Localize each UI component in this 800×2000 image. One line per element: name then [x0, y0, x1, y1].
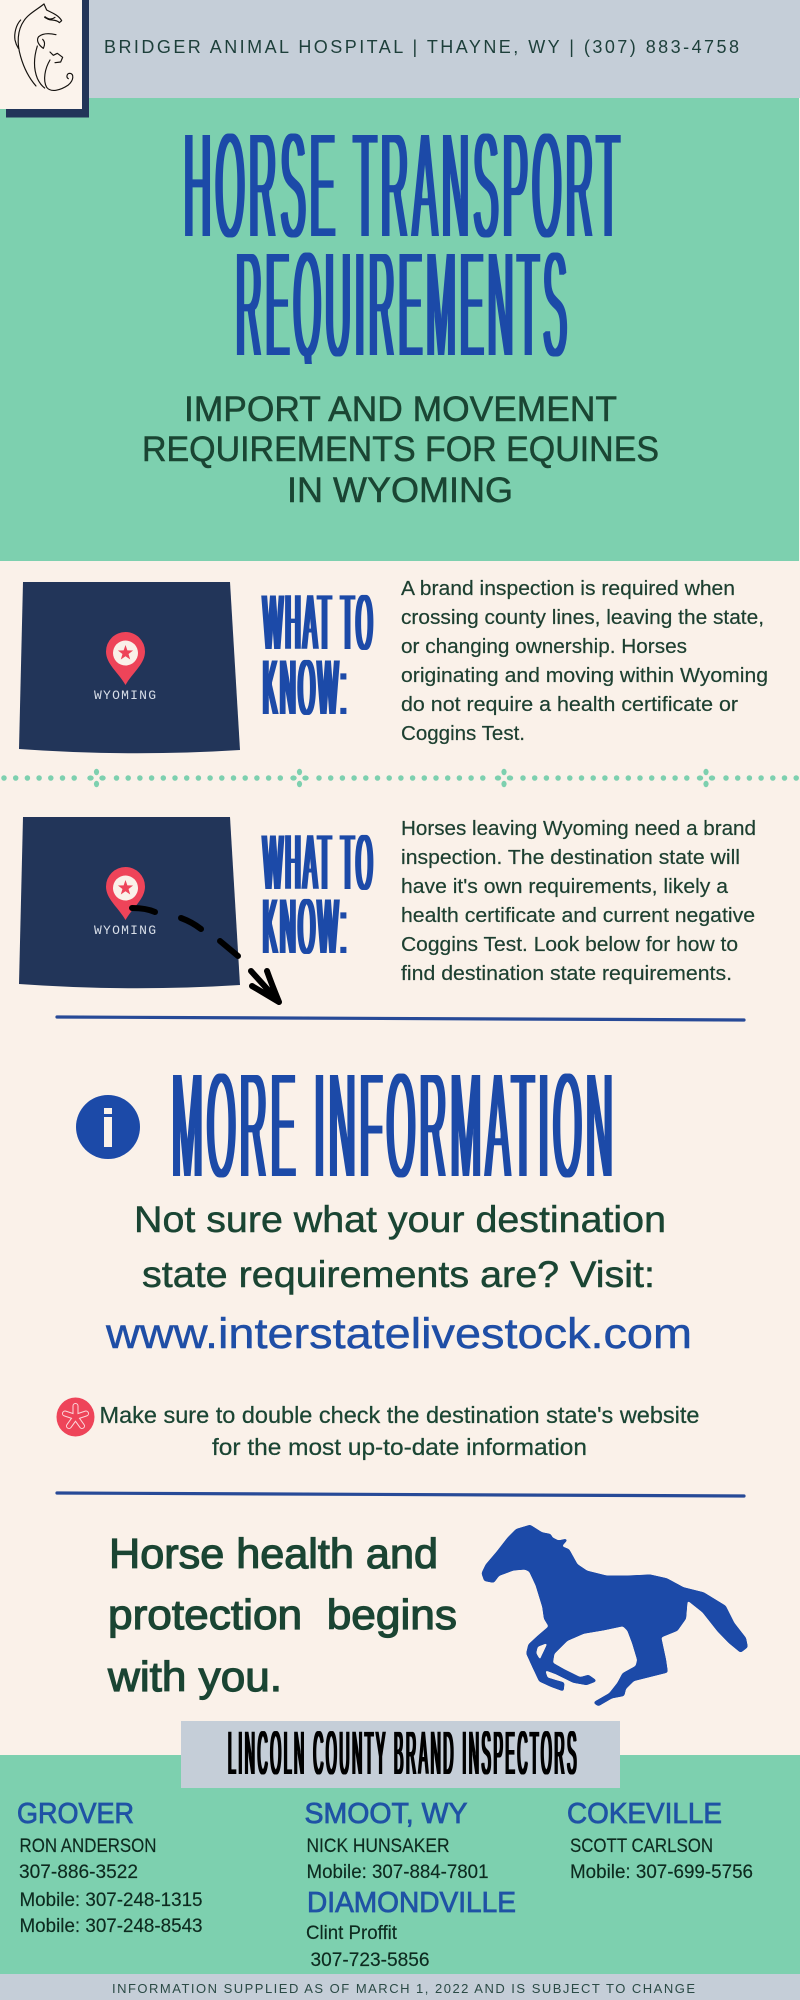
text block: out-of-state rules: Coggins Test. Look below for how to: [401, 933, 738, 956]
text block: out-of-state rules: find destination state requirements.: [401, 962, 732, 985]
heading: lincoln county brand inspectors: [181, 1719, 620, 1788]
text block: destination question: state requirements are? Visit:: [142, 1254, 655, 1295]
icon: location pin: [106, 867, 145, 920]
panel: horse health slogan: [107, 1526, 747, 1705]
website link: www.interstatelivestock.com: [105, 1310, 692, 1358]
contact: Grover: Mobile: 307-248-8543: [20, 1916, 202, 1937]
icon: Wyoming map with pin: [19, 817, 240, 988]
icon: clinic logo: [0, 0, 89, 118]
text block: in-state rules: or changing ownership. Horses: [401, 635, 687, 658]
text block: in-state rules: do not require a health certificate or: [401, 693, 738, 716]
text block: in-state rules: A brand inspection is required when: [401, 577, 735, 600]
contact: Cokeville: [567, 1798, 753, 1883]
contact: Smoot: Mobile: 307-884-7801: [306, 1862, 488, 1883]
contact: Smoot: SMOOT, WY: [304, 1798, 468, 1830]
contact: Grover: Mobile: 307-248-1315: [20, 1890, 202, 1911]
contact: Cokeville: SCOTT CARLSON: [570, 1836, 713, 1857]
text block: in-state rules: originating and moving within Wyoming: [401, 664, 768, 687]
contact: Cokeville: Mobile: 307-699-5756: [570, 1862, 753, 1883]
text block: double check note: Make sure to double check the destination state's website: [100, 1402, 700, 1428]
heading: what to know: [263, 818, 375, 972]
footer disclaimer: INFORMATION SUPPLIED AS OF MARCH 1, 2022 AND IS SUBJECT TO CHANGE: [112, 1981, 695, 1996]
heading: what to know: [263, 578, 375, 733]
text block: out-of-state rules: inspection. The destination state will: [401, 846, 740, 869]
panel: what to know, moving within Wyoming: WHAT TO: [263, 578, 375, 668]
panel: brand inspectors: [0, 1719, 800, 1974]
divider line: [57, 1493, 744, 1496]
text block: out-of-state rules: [401, 817, 756, 985]
arrow: dashed route out of state: [132, 908, 279, 1002]
text block: destination question: Not sure what your destination: [134, 1199, 666, 1240]
contact: Grover: RON ANDERSON: [20, 1836, 156, 1857]
footer: [0, 1974, 800, 2000]
text block: out-of-state rules: Horses leaving Wyoming need a brand: [401, 817, 756, 840]
text block: in-state rules: crossing county lines, leaving the state,: [401, 606, 764, 629]
divider line: [57, 1017, 744, 1020]
text block: double check note: for the most up-to-date information: [212, 1434, 587, 1460]
contact: Grover: 307-886-3522: [19, 1862, 138, 1883]
text block: out-of-state rules: health certificate and current negative: [401, 904, 755, 927]
text block: destination question: [134, 1199, 666, 1295]
contact: Grover: [17, 1798, 202, 1937]
panel: what to know, leaving Wyoming: WHAT TO: [263, 818, 375, 908]
dotted divider: [4, 769, 800, 787]
text block: slogan: Horse health and: [109, 1530, 438, 1577]
title: [185, 134, 621, 364]
panel: what to know, moving within Wyoming: [19, 577, 768, 753]
map label: WYOMING: [94, 923, 156, 938]
contact: Diamondville: 307-723-5856: [310, 1950, 430, 1971]
contact: Cokeville: COKEVILLE: [567, 1798, 722, 1830]
map label: WYOMING: [94, 688, 156, 703]
contact: Diamondville: [306, 1887, 516, 1971]
text block: slogan: protection begins: [108, 1591, 457, 1638]
panel: title section: [0, 98, 799, 561]
panel: what to know, leaving Wyoming: [19, 817, 756, 1002]
contact: Smoot: NICK HUNSAKER: [306, 1836, 450, 1857]
subtitle: REQUIREMENTS FOR EQUINES: [142, 430, 659, 469]
text block: in-state rules: Coggins Test.: [401, 722, 525, 745]
subtitle: [142, 390, 659, 510]
panel: what to know, moving within Wyoming: KNOW:: [263, 643, 349, 733]
panel: what to know, leaving Wyoming: KNOW:: [263, 882, 349, 972]
subtitle: IN WYOMING: [287, 471, 513, 510]
contact: Diamondville: DIAMONDVILLE: [307, 1887, 516, 1919]
subtitle: IMPORT AND MOVEMENT: [184, 390, 617, 429]
text block: slogan: [107, 1530, 457, 1700]
contact: Smoot: [304, 1798, 488, 1883]
text block: in-state rules: [401, 577, 768, 745]
text block: double check note: [100, 1402, 700, 1460]
contact: Diamondville: Clint Proffit: [306, 1923, 398, 1944]
icon: red asterisk badge: [56, 1398, 94, 1436]
text block: slogan: with you.: [107, 1653, 282, 1700]
header contact text: BRIDGER ANIMAL HOSPITAL | THAYNE, WY | (307) 883-4758: [104, 37, 739, 57]
icon: location pin: [106, 632, 145, 685]
icon: Wyoming map with pin: [19, 582, 240, 753]
contact: Grover: GROVER: [17, 1798, 134, 1830]
panel: more information: [56, 1041, 700, 1460]
icon: galloping horse: [483, 1526, 747, 1705]
text block: out-of-state rules: have it's own requirements, likely a: [401, 875, 729, 898]
header bar: [0, 0, 800, 98]
icon: info circle: [76, 1095, 140, 1159]
